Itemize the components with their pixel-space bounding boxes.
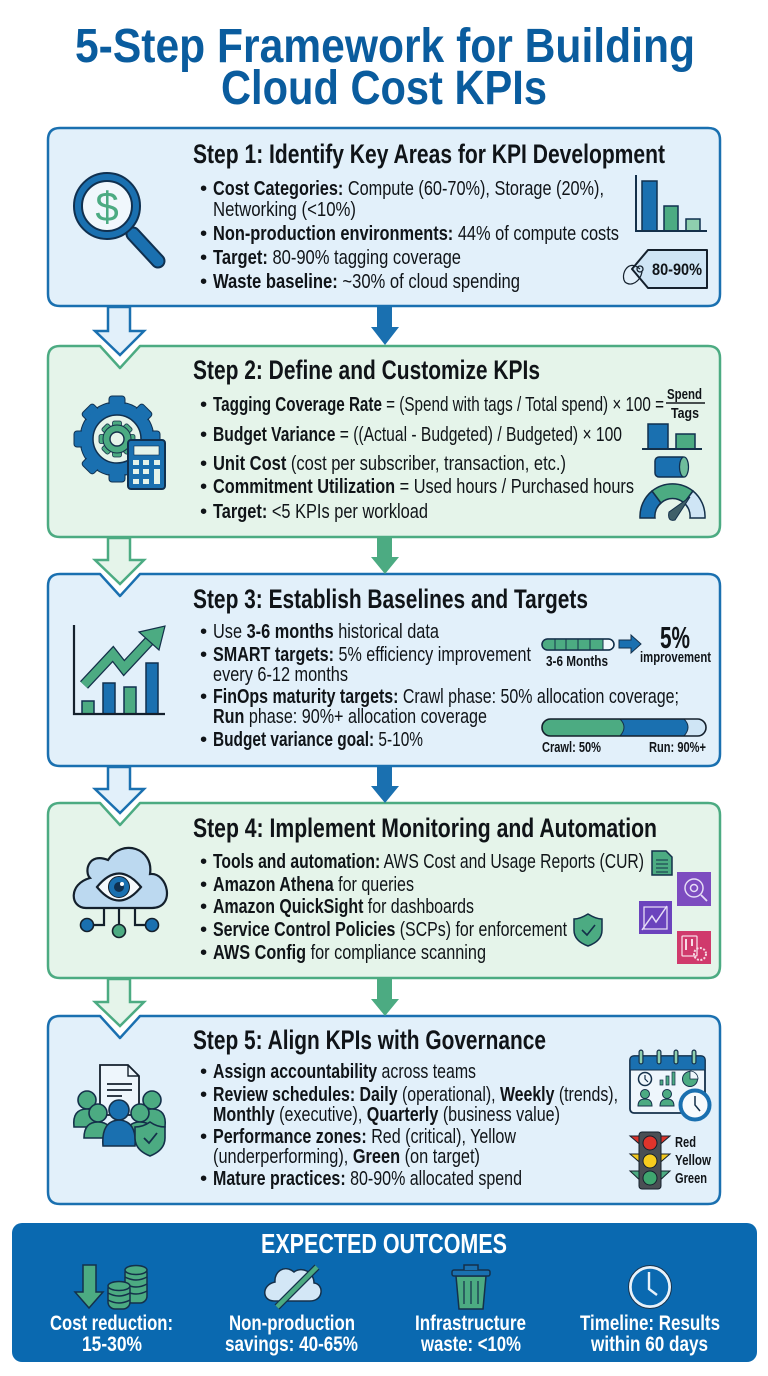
text block: step 5 bullets: • xyxy=(200,1060,207,1083)
text block: step 5 bullets: Performance zones: Red (critical), Yellow xyxy=(213,1125,516,1148)
fraction: spend over tags xyxy=(666,387,705,422)
text block: step 2 bullets: • xyxy=(200,423,207,446)
text block: step 4 bullets: Amazon QuickSight for dashboards xyxy=(213,895,474,918)
text block: step 4 bullets: AWS Config for compliance scanning xyxy=(213,941,486,964)
outcome: timeline: Timeline: Results xyxy=(580,1311,720,1335)
outcome: cost reduction: Cost reduction: xyxy=(50,1311,173,1335)
text block: step 3 bullets: every 6-12 months xyxy=(213,663,348,686)
progress: crawl to run bar: Run: 90%+ xyxy=(649,740,706,756)
text block: step 5 bullets: Review schedules: Daily (operational), Weekly (trends), xyxy=(213,1083,618,1106)
panel: step 3 xyxy=(48,574,720,766)
text block: step 2 bullets: • xyxy=(200,500,207,523)
text block: step 5 bullets: Assign accountability across teams xyxy=(213,1060,476,1083)
progress: 3-6 months to 5% improvement: 5% xyxy=(660,620,690,655)
text block: step 2 bullets: Target: <5 KPIs per workload xyxy=(213,500,428,523)
text block: step 4 bullets: • xyxy=(200,941,207,964)
text block: step 5 bullets: • xyxy=(200,1125,207,1148)
text block: step 2 bullets: Unit Cost (cost per subscriber, transaction, etc.) xyxy=(213,452,566,475)
text block: step 5 bullets: (underperforming), Green (on target) xyxy=(213,1145,480,1168)
outcome: non-production savings: Non-production xyxy=(229,1311,355,1335)
progress: crawl to run bar xyxy=(542,719,706,756)
progress: crawl to run bar: Crawl: 50% xyxy=(542,740,601,756)
icon: team with document and shield xyxy=(74,1065,165,1156)
icon: shield check xyxy=(574,914,602,946)
panel: step 5 xyxy=(48,1016,720,1204)
outcome: cost reduction xyxy=(50,1265,173,1356)
text block: step 5 bullets: Monthly (executive), Quarterly (business value) xyxy=(213,1103,560,1126)
progress: 3-6 months to 5% improvement xyxy=(542,620,711,670)
fraction: spend over tags: Tags xyxy=(671,406,699,422)
arrow: step 4 to step 5, solid xyxy=(371,979,399,1016)
arrow: step 3 to step 4, outline xyxy=(95,767,144,813)
chart icon: rising bars and arrow xyxy=(74,625,165,714)
text block: step 1 bullets: Networking (<10%) xyxy=(213,198,356,221)
heading: step 4: Step 4: Implement Monitoring and Automation xyxy=(193,813,657,843)
outcome: non-production savings: savings: 40-65% xyxy=(225,1332,358,1356)
heading: expected outcomes: EXPECTED OUTCOMES xyxy=(261,1228,507,1259)
text block: step 2 bullets: • xyxy=(200,393,207,416)
icon: quicksight square xyxy=(639,901,672,934)
icon: price tag 80-90% xyxy=(623,250,707,288)
title xyxy=(75,20,695,115)
title: Cloud Cost KPIs xyxy=(221,62,547,115)
text block: step 2 bullets: • xyxy=(200,475,207,498)
heading: step 2: Step 2: Define and Customize KPIs xyxy=(193,355,540,385)
text block: step 5 bullets: Mature practices: 80-90% allocated spend xyxy=(213,1167,522,1190)
outcome: infrastructure waste: Infrastructure xyxy=(415,1311,526,1335)
text block: step 3 bullets: • xyxy=(200,643,207,666)
icon: athena square xyxy=(677,872,711,906)
heading: step 3: Step 3: Establish Baselines and Targets xyxy=(193,584,588,614)
outcome: timeline xyxy=(580,1266,720,1356)
text block: step 3 bullets: SMART targets: 5% efficiency improvement xyxy=(213,643,531,666)
text block: step 5 bullets: • xyxy=(200,1083,207,1106)
outcome: non-production savings xyxy=(225,1267,358,1356)
text block: step 2 bullets: • xyxy=(200,452,207,475)
title: 5-Step Framework for Building xyxy=(75,20,695,73)
outcome: infrastructure waste xyxy=(415,1265,526,1356)
text block: step 3 bullets: • xyxy=(200,728,207,751)
text block: step 2 bullets: Budget Variance = ((Actual - Budgeted) / Budgeted) × 100 xyxy=(213,423,622,446)
progress: 3-6 months to 5% improvement: improvement xyxy=(640,650,711,666)
arrow: step 3 to step 4, solid xyxy=(371,767,399,803)
text block: step 1 bullets: • xyxy=(200,270,207,293)
chart: cost categories bars xyxy=(636,175,707,231)
text block: step 1 bullets: Non-production environments: 44% of compute costs xyxy=(213,222,619,245)
icon: calendar with clock xyxy=(630,1052,710,1120)
icon: traffic light xyxy=(630,1132,712,1189)
outcome: cost reduction: 15-30% xyxy=(82,1332,142,1356)
icon: cylinder xyxy=(655,457,688,477)
chart: budget bars xyxy=(642,424,702,449)
text block: step 4 bullets xyxy=(200,850,644,964)
arrow: step 1 to step 2, solid xyxy=(371,307,399,345)
text block: step 3 bullets: • xyxy=(200,685,207,708)
text block: step 1 bullets: • xyxy=(200,246,207,269)
icon: gauge xyxy=(640,484,705,520)
text block: step 2 bullets: Tagging Coverage Rate = (Spend with tags / Total spend) × 100 = xyxy=(213,393,664,416)
arrow: step 2 to step 3, solid xyxy=(371,538,399,574)
text block: step 3 bullets xyxy=(200,620,679,751)
text block: step 1 bullets: Cost Categories: Compute (60-70%), Storage (20%), xyxy=(213,177,604,200)
text block: step 2 bullets xyxy=(200,393,664,523)
heading: step 5: Step 5: Align KPIs with Governance xyxy=(193,1025,546,1055)
text block: step 1 bullets: Target: 80-90% tagging coverage xyxy=(213,246,461,269)
text block: step 3 bullets: Budget variance goal: 5-10% xyxy=(213,728,423,751)
text block: step 4 bullets: • xyxy=(200,918,207,941)
panel: expected outcomes xyxy=(12,1223,757,1362)
text block: step 1 bullets: • xyxy=(200,177,207,200)
text block: step 4 bullets: • xyxy=(200,850,207,873)
icon: config square xyxy=(677,931,711,964)
icon: traffic light: Red xyxy=(675,1135,696,1151)
panel: step 2 xyxy=(48,346,720,537)
text block: step 4 bullets: • xyxy=(200,873,207,896)
icon: traffic light: Yellow xyxy=(675,1153,712,1169)
icon: cloud with eye and nodes xyxy=(74,848,167,938)
arrow: step 2 to step 3, outline xyxy=(95,538,144,584)
outcome: infrastructure waste: waste: <10% xyxy=(420,1332,521,1356)
panel: step 4 xyxy=(48,803,720,978)
text block: step 3 bullets: FinOps maturity targets: Crawl phase: 50% allocation coverage; xyxy=(213,685,679,708)
panel: step 1 xyxy=(48,128,720,306)
icon: magnifying glass with dollar xyxy=(78,177,158,261)
icon: gear and calculator xyxy=(74,396,165,489)
arrow: step 4 to step 5, outline xyxy=(95,979,144,1026)
text block: step 1 bullets: • xyxy=(200,222,207,245)
progress: 3-6 months to 5% improvement: 3-6 Months xyxy=(546,654,608,670)
text block: step 5 bullets xyxy=(200,1060,618,1190)
text block: step 5 bullets: • xyxy=(200,1167,207,1190)
icon: price tag 80-90%: 80-90% xyxy=(652,260,702,279)
text block: step 3 bullets: Use 3-6 months historical data xyxy=(213,620,439,643)
arrow: step 1 to step 2, outline xyxy=(95,307,144,355)
text block: step 4 bullets: • xyxy=(200,895,207,918)
text block: step 4 bullets: Tools and automation: AWS Cost and Usage Reports (CUR) xyxy=(213,850,644,873)
fraction: spend over tags: Spend xyxy=(667,387,702,403)
text block: step 1 bullets xyxy=(200,177,619,293)
icon: report document xyxy=(652,851,672,875)
icon: magnifying glass with dollar: $ xyxy=(95,183,119,230)
text block: step 2 bullets: Commitment Utilization = Used hours / Purchased hours xyxy=(213,475,634,498)
text block: step 4 bullets: Amazon Athena for queries xyxy=(213,873,414,896)
text block: step 1 bullets: Waste baseline: ~30% of cloud spending xyxy=(213,270,520,293)
text block: step 3 bullets: • xyxy=(200,620,207,643)
icon: traffic light: Green xyxy=(675,1171,707,1187)
text block: step 4 bullets: Service Control Policies (SCPs) for enforcement xyxy=(213,918,567,941)
text block: step 3 bullets: Run phase: 90%+ allocation coverage xyxy=(213,705,487,728)
outcome: timeline: within 60 days xyxy=(590,1332,708,1356)
